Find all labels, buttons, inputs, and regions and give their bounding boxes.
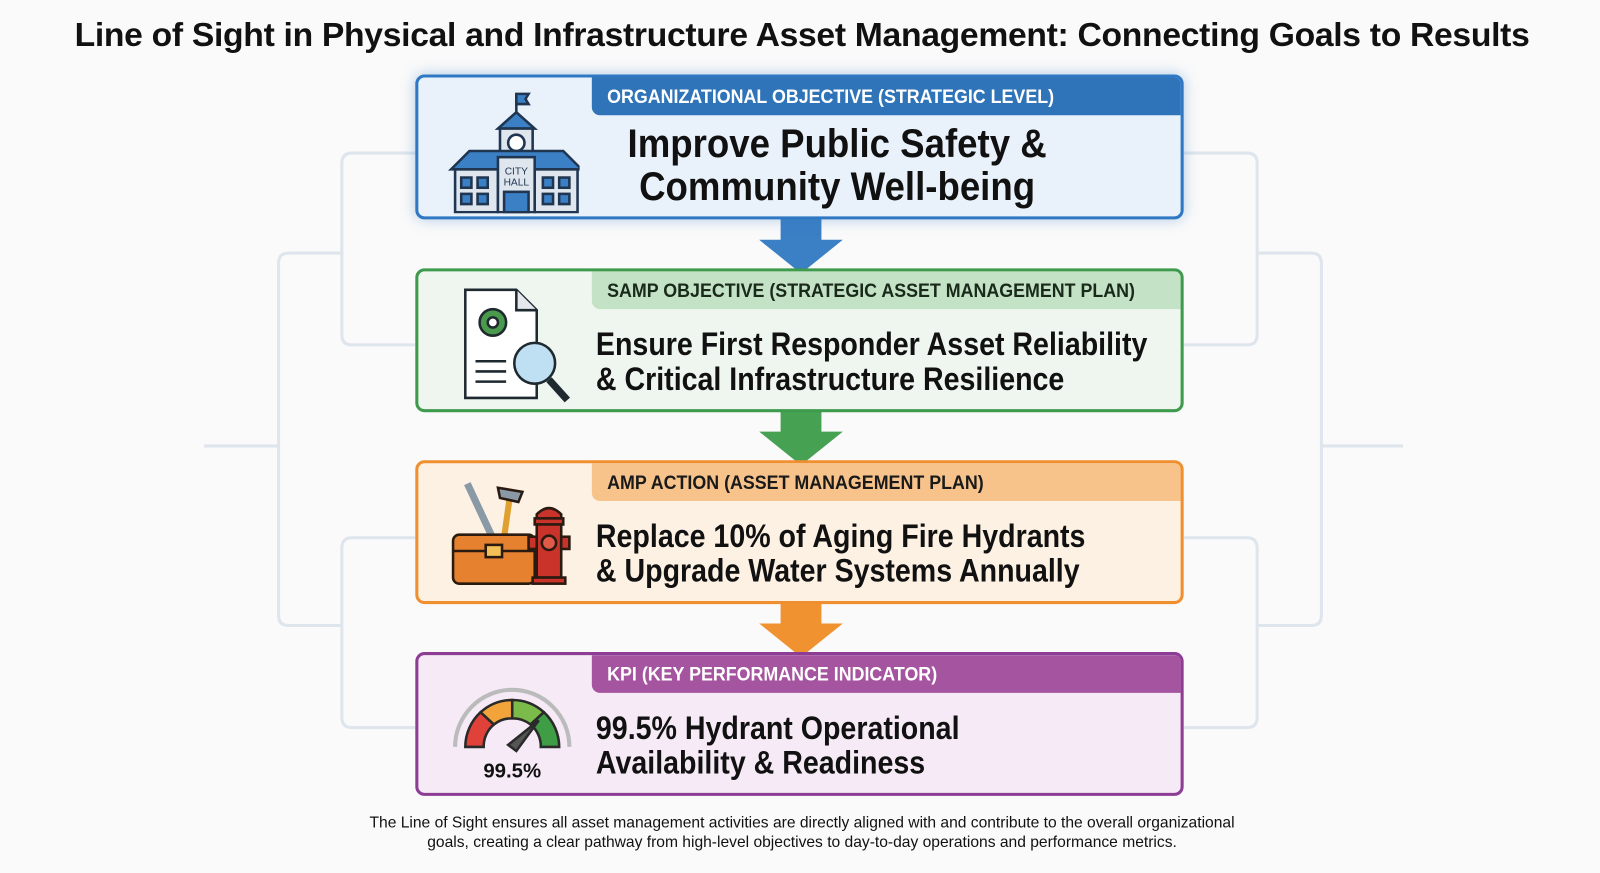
panel: organizational objective xyxy=(415,74,1184,219)
main text: 99.5% Hydrant Operational xyxy=(596,709,960,746)
main text: & Critical Infrastructure Resilience xyxy=(596,360,1064,397)
header xyxy=(592,463,1181,501)
icon: city hall xyxy=(448,92,580,214)
header xyxy=(592,78,1181,115)
panel: AMP action xyxy=(415,460,1184,604)
main text xyxy=(596,326,1148,397)
arrow 3 xyxy=(759,603,843,657)
main text xyxy=(596,709,960,781)
main text xyxy=(628,122,1047,209)
icon: toolbox and hydrant xyxy=(452,482,571,585)
main text: & Upgrade Water Systems Annually xyxy=(596,552,1080,589)
header: KPI (KEY PERFORMANCE INDICATOR) xyxy=(607,664,937,686)
header xyxy=(592,655,1181,693)
main text xyxy=(596,517,1085,589)
header: AMP ACTION (ASSET MANAGEMENT PLAN) xyxy=(607,472,984,494)
icon: city hall: CITY xyxy=(505,166,528,177)
header xyxy=(592,271,1181,309)
arrow 1 xyxy=(759,218,843,273)
panel: KPI xyxy=(415,652,1184,796)
footer text: goals, creating a clear pathway from high-level objectives to day-to-day operations and performance metrics. xyxy=(427,834,1177,851)
title: Line of Sight in Physical and Infrastructure Asset Management: Connecting Goals to Results xyxy=(75,15,1529,53)
icon: gauge xyxy=(453,688,572,783)
icon: gauge: 99.5% xyxy=(483,761,541,783)
main text: Improve Public Safety & xyxy=(628,122,1047,166)
footer text: The Line of Sight ensures all asset management activities are directly aligned with and contribute to the overall organizational xyxy=(369,814,1235,832)
main text: Ensure First Responder Asset Reliability xyxy=(596,326,1147,362)
main text: Community Well-being xyxy=(639,165,1035,209)
panel: SAMP objective xyxy=(415,268,1184,412)
main text: Replace 10% of Aging Fire Hydrants xyxy=(596,517,1085,554)
header: SAMP OBJECTIVE (STRATEGIC ASSET MANAGEMENT PLAN) xyxy=(607,281,1135,302)
footer text xyxy=(369,814,1235,851)
icon: document with gear and magnifier xyxy=(464,288,570,402)
icon: city hall: HALL xyxy=(504,178,529,189)
header: ORGANIZATIONAL OBJECTIVE (STRATEGIC LEVEL) xyxy=(607,87,1054,108)
arrow 2 xyxy=(759,411,843,465)
main text: Availability & Readiness xyxy=(596,744,925,781)
